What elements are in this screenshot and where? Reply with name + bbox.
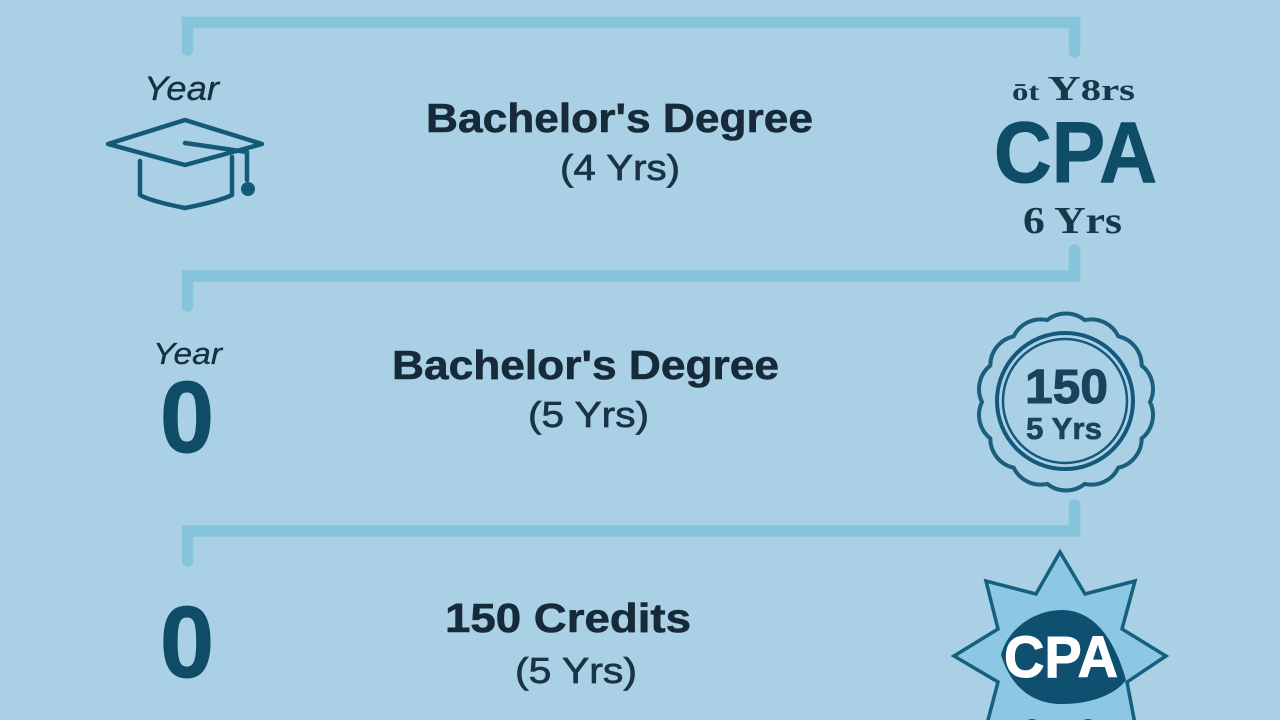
large CPA text: CPA <box>994 105 1157 201</box>
row 3: 150 credits, 5 years <box>160 505 1166 720</box>
year label: Year <box>153 336 224 371</box>
seal number: 150 <box>1025 361 1108 414</box>
connector bracket 2 <box>188 250 1074 306</box>
icon: 150 credit seal <box>979 314 1153 490</box>
connector bracket 1 <box>188 22 1074 52</box>
year label: Year <box>144 70 221 108</box>
top years label: ōt Y 8rs <box>1012 69 1135 108</box>
row 2: bachelor's degree, 5 years <box>153 250 1153 490</box>
duration: 4 years: (4 Yrs) <box>560 147 680 188</box>
heading: 150 credits: 150 Credits <box>445 595 691 641</box>
year number: 0 <box>160 362 214 474</box>
connector bracket 3 <box>188 505 1074 561</box>
seal duration: 5 Yrs <box>1026 411 1102 446</box>
heading: bachelor's degree: Bachelor's Degree <box>392 342 779 388</box>
year number: 0 <box>160 587 214 699</box>
row 1: bachelor's degree, 4 years <box>108 22 1157 242</box>
6 years label: 6 Yrs <box>1023 200 1122 242</box>
duration: 5 years: (5 Yrs) <box>528 394 649 435</box>
icon: CPA star badge <box>954 552 1166 720</box>
badge CPA text: CPA <box>1004 625 1118 690</box>
icon: graduation cap <box>108 120 262 208</box>
duration: 5 years: (5 Yrs) <box>515 650 637 691</box>
heading: bachelor's degree: Bachelor's Degree <box>426 95 813 141</box>
